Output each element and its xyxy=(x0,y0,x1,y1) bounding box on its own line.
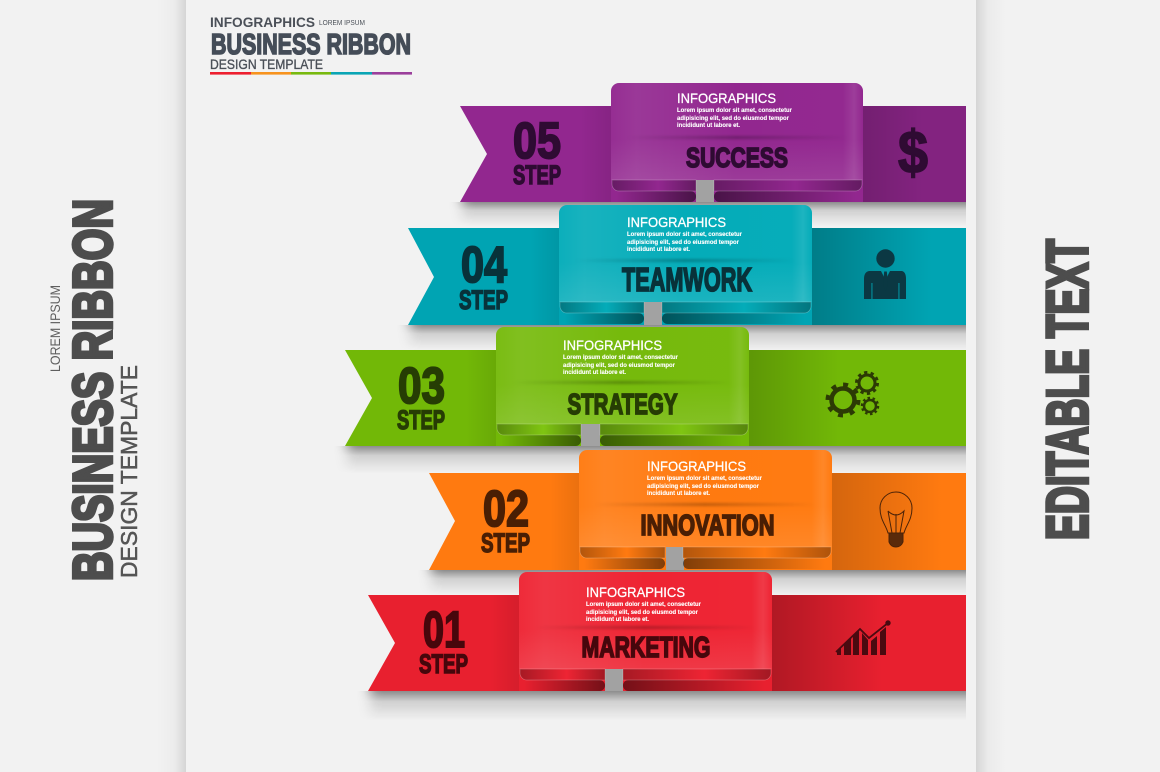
panel: success xyxy=(611,83,863,202)
header title block xyxy=(210,14,412,75)
step number 02: 02 xyxy=(483,480,529,537)
ribbon 05 success xyxy=(460,83,992,226)
panel: innovation xyxy=(579,450,832,569)
step number 05: STEP xyxy=(513,160,561,190)
icon: gears xyxy=(828,372,878,416)
panel: teamwork xyxy=(559,205,812,324)
step number 03 xyxy=(397,357,445,435)
step number 01 xyxy=(419,601,468,679)
step number 04: 04 xyxy=(461,236,508,293)
header: business ribbon: BUSINESS RIBBON xyxy=(211,29,411,61)
header: design template: DESIGN TEMPLATE xyxy=(210,57,323,72)
panel: teamwork: Lorem ipsum dolor sit amet, consectetur xyxy=(627,231,742,238)
panel: teamwork: INFOGRAPHICS xyxy=(627,214,726,230)
panel: marketing: adipisicing elit, sed do eiusmod tempor xyxy=(586,609,698,616)
vertical: business ribbon: BUSINESS RIBBON xyxy=(62,199,124,581)
header: colour bar xyxy=(210,72,412,75)
ribbon 04 teamwork xyxy=(408,205,990,350)
header: lorem ipsum label: LOREM IPSUM xyxy=(319,20,365,27)
panel: innovation: incididunt ut labore et. xyxy=(647,490,710,497)
panel: success: Lorem ipsum dolor sit amet, consectetur xyxy=(677,107,792,114)
step number 01: STEP xyxy=(419,649,468,679)
panel: marketing: Lorem ipsum dolor sit amet, consectetur xyxy=(586,601,701,608)
step number 04: STEP xyxy=(459,285,508,315)
panel: marketing xyxy=(519,572,772,691)
ribbon 02 innovation xyxy=(429,450,991,595)
step number 04 xyxy=(459,236,508,315)
right vertical title: EDITABLE TEXT xyxy=(1036,239,1100,540)
left vertical title xyxy=(47,199,142,581)
step number 02: STEP xyxy=(481,528,530,558)
ribbon 01 marketing xyxy=(368,572,990,721)
panel: strategy xyxy=(496,327,749,446)
panel: innovation: INNOVATION xyxy=(640,510,774,542)
panel: success: INFOGRAPHICS xyxy=(677,90,776,106)
panel: success: incididunt ut labore et. xyxy=(677,122,740,129)
panel: marketing: incididunt ut labore et. xyxy=(586,616,649,623)
panel: strategy: Lorem ipsum dolor sit amet, consectetur xyxy=(563,354,678,361)
header: infographics label: INFOGRAPHICS xyxy=(210,14,315,30)
panel: innovation: INFOGRAPHICS xyxy=(647,458,746,474)
step number 03: 03 xyxy=(398,357,445,414)
vertical: design template: DESIGN TEMPLATE xyxy=(116,365,142,578)
panel: success: adipisicing elit, sed do eiusmod tempor xyxy=(677,115,789,122)
step number 03: STEP xyxy=(397,405,445,435)
icon: business person xyxy=(864,249,906,299)
panel: strategy: incididunt ut labore et. xyxy=(563,369,626,376)
icon: dollar: $ xyxy=(898,119,928,186)
panel: success: SUCCESS xyxy=(686,142,788,173)
icon: light bulb xyxy=(880,492,912,547)
panel: strategy: adipisicing elit, sed do eiusmod tempor xyxy=(563,362,675,369)
step number 05 xyxy=(513,112,561,190)
panel: strategy: STRATEGY xyxy=(568,389,678,421)
panel: marketing: INFOGRAPHICS xyxy=(586,584,685,600)
panel: innovation: Lorem ipsum dolor sit amet, consectetur xyxy=(647,475,762,482)
vertical: lorem ipsum: LOREM IPSUM xyxy=(47,285,63,372)
ribbon 03 strategy xyxy=(345,327,992,473)
icon: growth chart xyxy=(836,620,891,655)
panel: marketing: MARKETING xyxy=(582,632,710,664)
step number 05: 05 xyxy=(513,112,561,169)
panel: teamwork: incididunt ut labore et. xyxy=(627,246,690,253)
panel: innovation: adipisicing elit, sed do eiusmod tempor xyxy=(647,483,759,490)
step number 01: 01 xyxy=(423,601,465,658)
panel: teamwork: TEAMWORK xyxy=(622,261,752,298)
panel: teamwork: adipisicing elit, sed do eiusmod tempor xyxy=(627,239,739,246)
panel: strategy: INFOGRAPHICS xyxy=(563,337,662,353)
step number 02 xyxy=(481,480,530,558)
